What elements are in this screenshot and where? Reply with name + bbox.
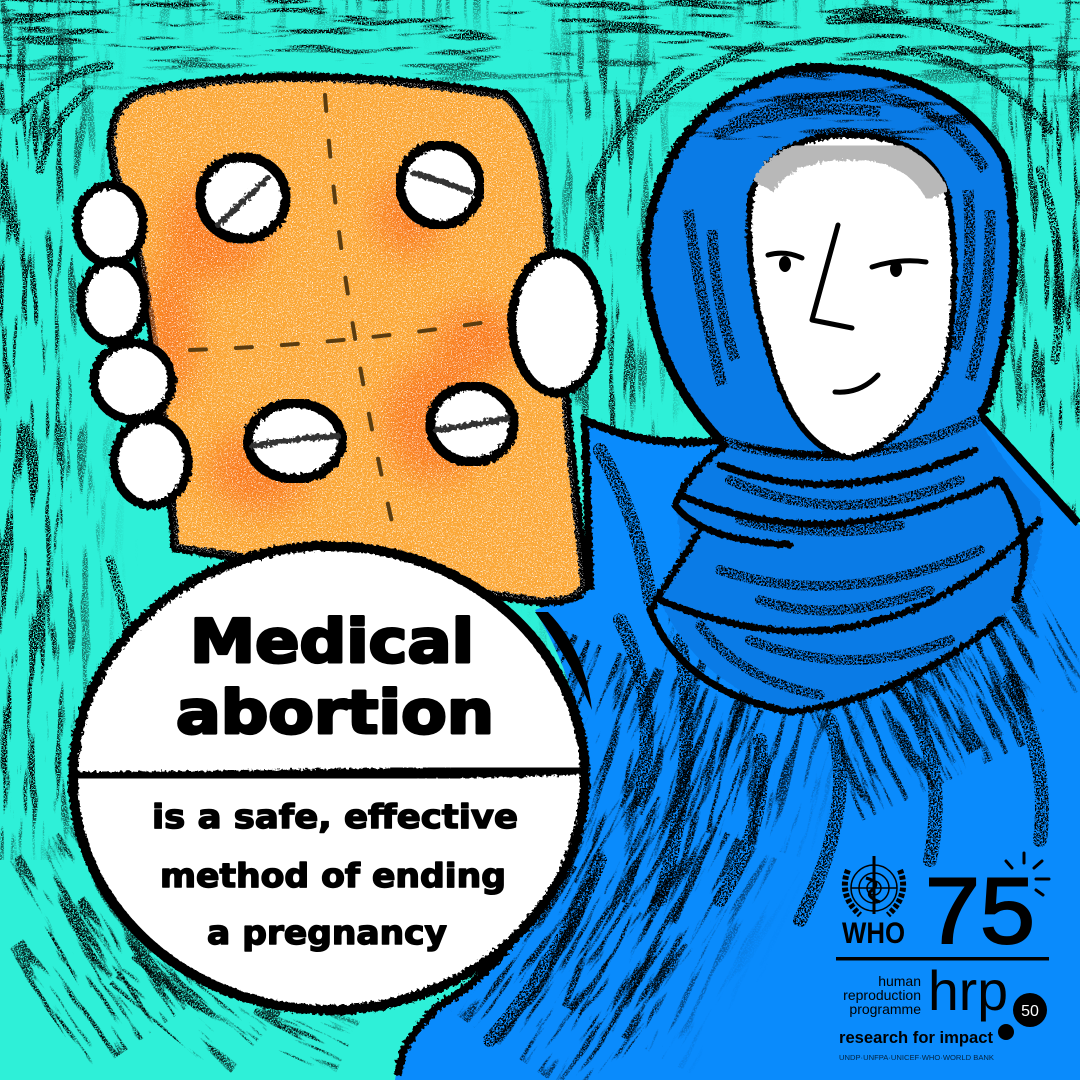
HRP programme name: human (878, 973, 921, 989)
research for impact: research for impact (839, 1028, 993, 1047)
heading: abortion (176, 678, 494, 748)
orange shading around pills (145, 175, 525, 510)
HRP programme name (843, 973, 921, 1017)
perforations (190, 95, 500, 535)
hrp wordmark: hrp (928, 959, 1008, 1022)
scarf chalk shading (700, 420, 980, 695)
pill top right (400, 145, 480, 225)
hair band (763, 148, 938, 196)
mouth (835, 375, 878, 392)
hand fingers and thumb (77, 185, 602, 505)
pill bottom right (430, 386, 514, 462)
subheading: is a safe, effective (152, 797, 518, 836)
scarf folds (650, 445, 1040, 712)
right eye and brow (872, 261, 926, 267)
robe outline (398, 420, 1078, 1075)
icon: WHO emblem (845, 856, 903, 915)
WHO label: WHO (842, 917, 905, 950)
nose (812, 225, 852, 328)
HRP programme name: reproduction (843, 987, 921, 1003)
hood texture (692, 70, 972, 140)
hood shading (688, 96, 990, 385)
pill shape (73, 546, 585, 1010)
figure: woman in blue hood (395, 60, 1080, 1080)
partner organisations: UNDP·UNFPA·UNICEF·WHO·WORLD BANK (839, 1055, 994, 1062)
robe chalk texture (451, 576, 1080, 1080)
score line (72, 768, 585, 778)
scarf (660, 405, 1042, 712)
face shape (749, 135, 954, 458)
pill top left (200, 157, 286, 239)
left eye and brow (768, 253, 802, 258)
body and robe (395, 420, 1080, 1080)
hrp 50 badge: 50 (1021, 1003, 1039, 1020)
divider (836, 957, 1049, 960)
subheading: a pregnancy (207, 913, 447, 952)
heading (176, 607, 494, 748)
HRP programme name: programme (849, 1001, 921, 1017)
dark edge beside pill (535, 612, 592, 710)
robe chalk strokes (490, 450, 1042, 1040)
heading: Medical (190, 607, 474, 677)
hood (645, 68, 1014, 457)
blister pack (110, 77, 590, 602)
large pill callout (72, 546, 585, 1010)
logos (836, 853, 1049, 1062)
subheading: method of ending (160, 856, 506, 895)
card body (111, 77, 585, 602)
subheading (152, 797, 518, 952)
card grain (110, 80, 590, 600)
face (749, 135, 954, 458)
hrp 50 badge (998, 993, 1047, 1040)
pill bottom left (248, 403, 342, 479)
75 anniversary mark: 75 (925, 858, 1035, 963)
